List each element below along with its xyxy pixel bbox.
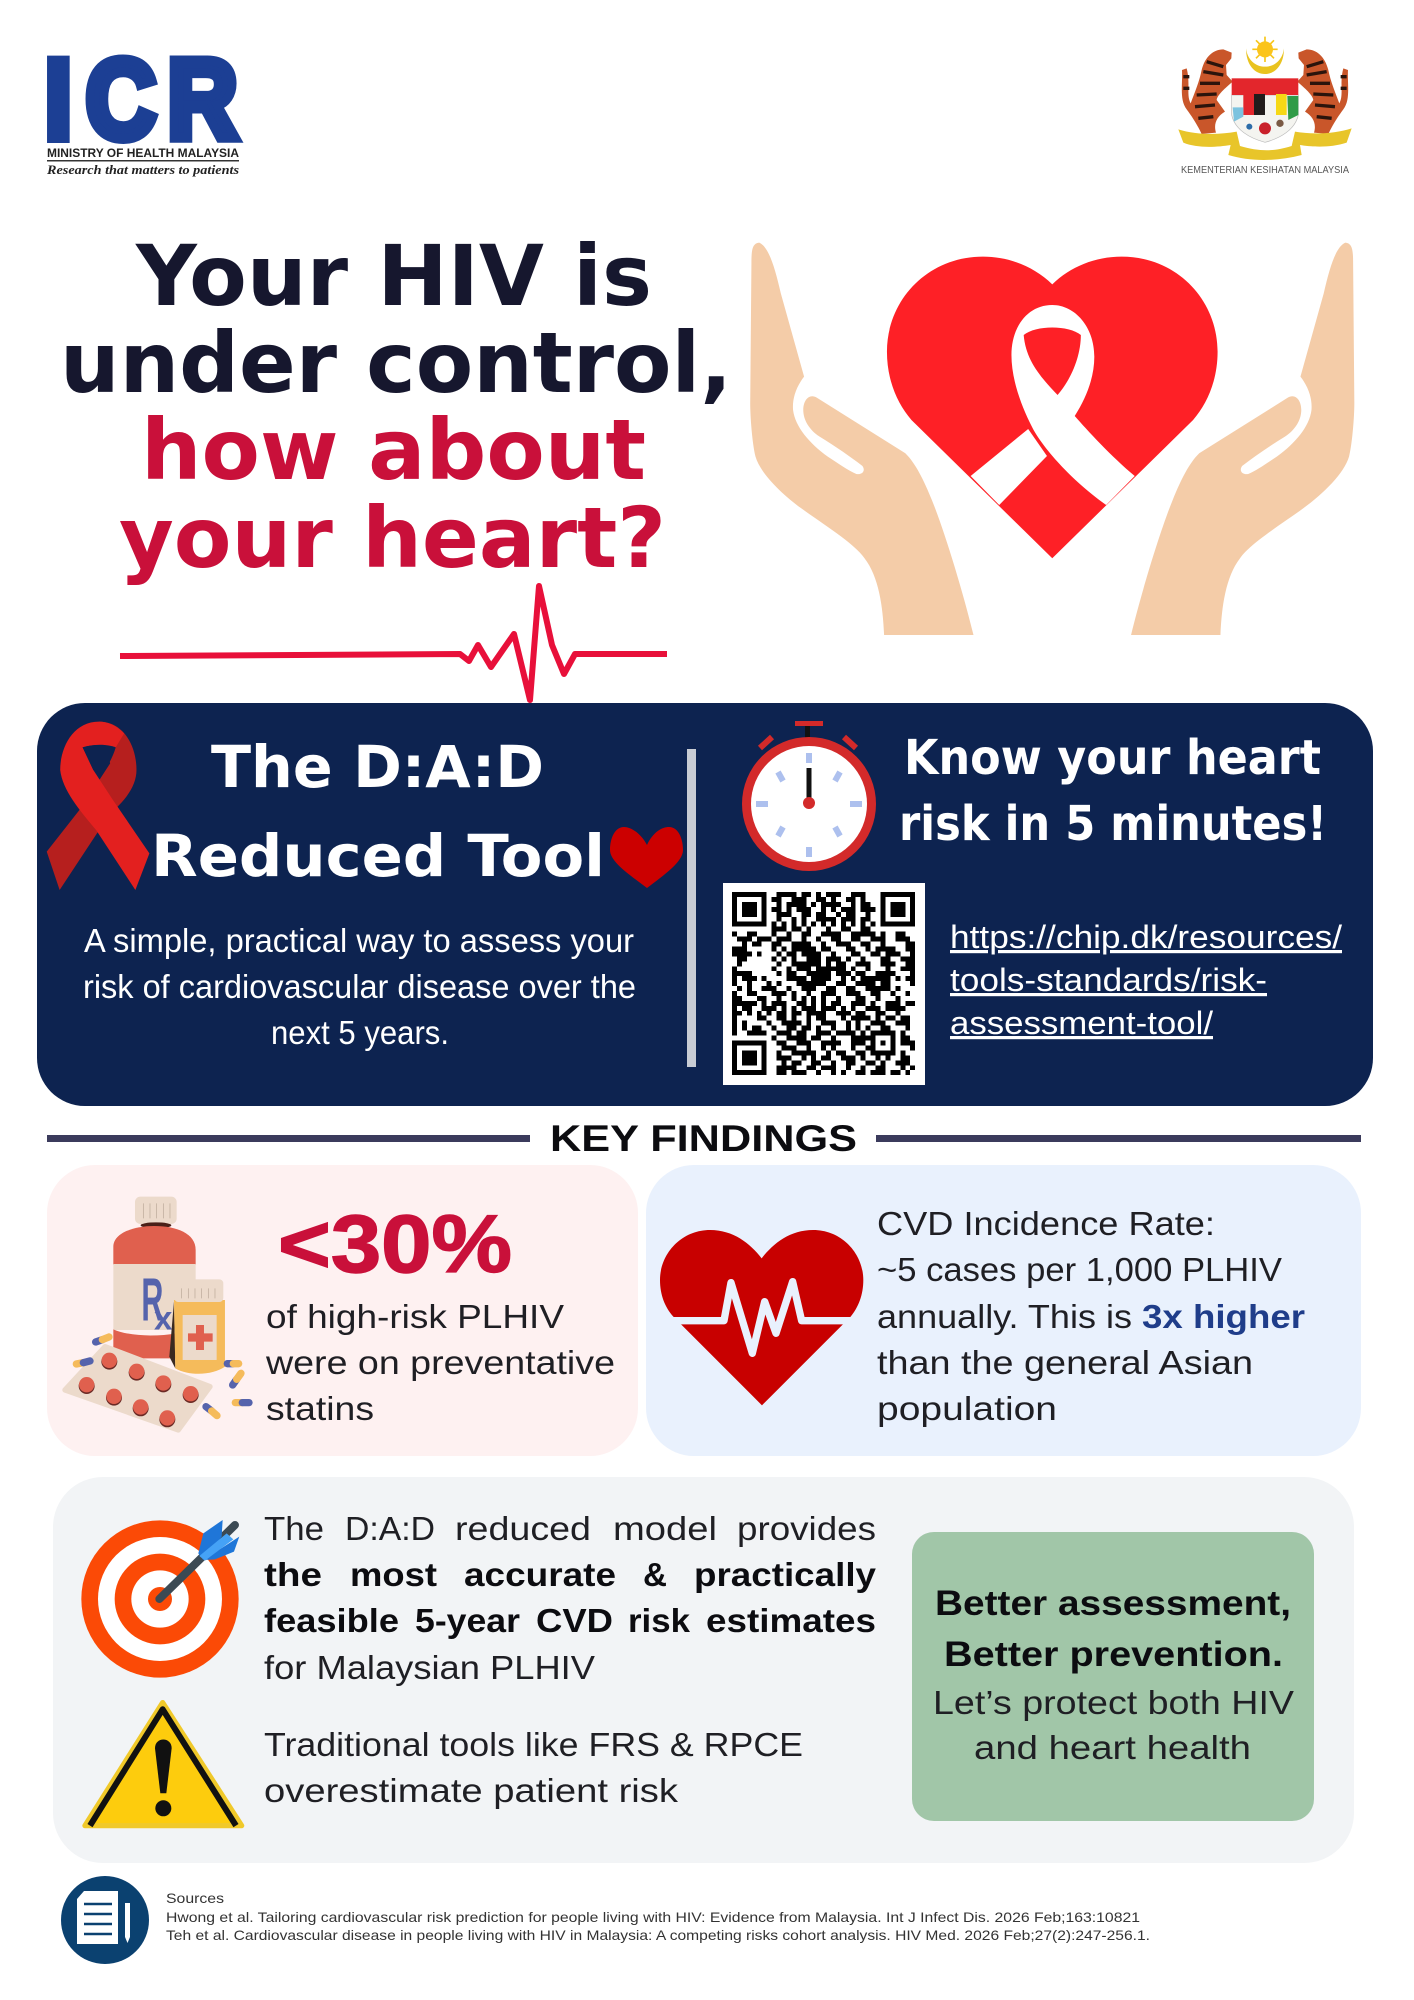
logo: ICR Ministry of Health Malaysia: Research that matters to patients xyxy=(46,162,239,177)
description text xyxy=(83,922,636,1051)
text: sources: Teh et al. Cardiovascular disease in people living with HIV in Malaysia: A competing risks cohort analysis. HIV Med. 2026 Feb;27(2):247-256.1. xyxy=(166,1927,1150,1943)
text: most accurate model: accurate xyxy=(464,1556,616,1593)
callout: better assessment, better prevention: Let’s protect both HIV xyxy=(933,1684,1294,1721)
text: most accurate model: feasible xyxy=(264,1602,399,1639)
callout: better assessment, better prevention xyxy=(912,1532,1314,1821)
white gap left of ribbon tail xyxy=(971,429,1047,505)
title line: your heart: your heart? xyxy=(119,489,666,587)
text: most accurate model: D:A:D xyxy=(345,1510,435,1547)
icon: stopwatch xyxy=(742,721,876,871)
icon: hands holding heart with awareness ribbon xyxy=(750,243,1354,635)
link text: https://chip.dk/resources/ xyxy=(950,919,1342,955)
description text: A simple, practical way to assess your xyxy=(84,922,634,959)
red heart xyxy=(887,257,1218,558)
icon: ECG heartbeat line xyxy=(120,586,667,700)
right hand xyxy=(1131,243,1354,635)
text: most accurate model: & xyxy=(643,1556,667,1593)
heading: Know your heart risk in 5 minutes xyxy=(899,730,1327,852)
title line: under control: under control, xyxy=(60,314,732,412)
link text: assessment-tool/ xyxy=(950,1005,1213,1041)
text: sources: Hwong et al. Tailoring cardiovascular risk prediction for people living with HIV: Evidence from Malaysia. Int J Infect Dis. 2026 Feb;163:10821 xyxy=(166,1909,1140,1925)
logo: ICR Ministry of Health Malaysia: ICR xyxy=(45,38,238,163)
callout: better assessment, better prevention: Better assessment, xyxy=(935,1584,1291,1623)
text: most accurate model: CVD xyxy=(536,1602,613,1639)
description text: risk of cardiovascular disease over the xyxy=(83,968,636,1005)
text: statin description: of high-risk PLHIV xyxy=(266,1298,564,1335)
callout: better assessment, better prevention: Better prevention. xyxy=(944,1635,1283,1674)
logo: Malaysian coat of arms, Kementerian Kesihatan Malaysia xyxy=(1178,37,1352,176)
text: most accurate model xyxy=(264,1510,877,1686)
text: incidence rate: population xyxy=(877,1390,1057,1427)
ribbon loop window xyxy=(1024,327,1081,395)
heading: Know your heart risk in 5 minutes: risk in 5 minutes! xyxy=(899,796,1327,852)
text: incidence rate: than the general Asian xyxy=(877,1344,1253,1381)
text: statin description: were on preventative xyxy=(265,1344,615,1381)
text: traditional tools overestimate: Traditional tools like FRS & RPCE xyxy=(264,1726,803,1763)
text: incidence rate: CVD Incidence Rate: xyxy=(877,1205,1215,1242)
text: incidence rate xyxy=(877,1205,1305,1427)
text: most accurate model: model xyxy=(613,1510,717,1547)
divider xyxy=(687,749,696,1067)
text: sources: Sources xyxy=(166,1890,224,1906)
logo: Malaysian coat of arms, Kementerian Kesihatan Malaysia: KEMENTERIAN KESIHATAN MALAYSIA xyxy=(1181,165,1349,176)
icon: target with dart xyxy=(81,1520,239,1678)
icon: warning triangle xyxy=(85,1703,242,1826)
text: incidence rate: annually. This is xyxy=(877,1298,1132,1335)
text: most accurate model: for Malaysian PLHIV xyxy=(264,1649,595,1686)
panel: statin finding xyxy=(47,1165,638,1456)
icon: medicine bottles and pills: R xyxy=(141,1266,163,1335)
text: most accurate model: provides xyxy=(737,1510,876,1547)
icon: medicine bottles and pills xyxy=(65,1197,249,1430)
text: most accurate model: risk xyxy=(628,1602,691,1639)
link text: tools-standards/risk- xyxy=(950,962,1267,998)
text: most accurate model: practically xyxy=(694,1556,877,1593)
text: most accurate model: reduced xyxy=(455,1510,591,1547)
heading: Know your heart risk in 5 minutes: Know your heart xyxy=(904,730,1321,786)
text: traditional tools overestimate xyxy=(264,1726,803,1809)
panel: CVD incidence finding xyxy=(646,1165,1361,1456)
stat: less than 30 percent: <30% xyxy=(278,1199,512,1290)
title line: Your HIV is: Your HIV is xyxy=(135,227,652,325)
text: most accurate model: The xyxy=(264,1510,324,1547)
callout: better assessment, better prevention: and heart health xyxy=(974,1729,1251,1766)
text: sources xyxy=(166,1890,1150,1943)
text: incidence rate: 3x higher xyxy=(1142,1298,1305,1335)
heading: Reduced Tool: Reduced Tool xyxy=(151,822,605,890)
text: statin description xyxy=(265,1298,615,1427)
link text xyxy=(950,919,1342,1041)
icon: heart with pulse xyxy=(660,1230,863,1405)
text: most accurate model: 5-year xyxy=(415,1602,520,1639)
text: statin description: statins xyxy=(266,1390,374,1427)
white ribbon xyxy=(1011,305,1135,505)
title line: how about: how about xyxy=(141,401,646,499)
icon: medicine bottles and pills: x xyxy=(154,1300,173,1337)
heading: The D:A:D: The D:A:D xyxy=(211,733,544,801)
text: incidence rate: ~5 cases per 1,000 PLHIV xyxy=(877,1251,1282,1288)
left hand xyxy=(750,243,973,635)
text: most accurate model: estimates xyxy=(706,1602,876,1639)
text: traditional tools overestimate: overestimate patient risk xyxy=(264,1772,679,1809)
QR code xyxy=(723,883,925,1085)
description text: next 5 years. xyxy=(271,1014,449,1051)
panel: model accuracy and call to action xyxy=(53,1477,1354,1863)
text: most accurate model: most xyxy=(350,1556,437,1593)
logo: ICR Ministry of Health Malaysia: MINISTRY OF HEALTH MALAYSIA xyxy=(47,146,239,160)
title xyxy=(60,227,732,587)
icon: red awareness ribbon xyxy=(47,722,149,890)
text: most accurate model: the xyxy=(264,1556,322,1593)
section heading: Key Findings: KEY FINDINGS xyxy=(550,1118,857,1159)
panel: D:A:D Reduced Tool xyxy=(37,703,1373,1106)
icon: small red heart xyxy=(610,827,683,888)
section heading: Key Findings xyxy=(47,1118,1361,1159)
icon: document and pen xyxy=(61,1876,149,1964)
